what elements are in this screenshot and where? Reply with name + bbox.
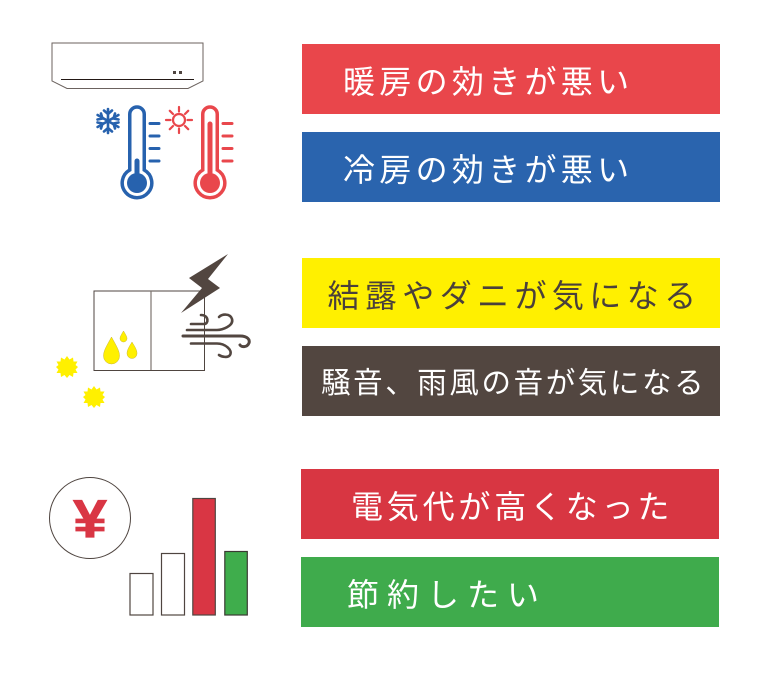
icon: window — [94, 291, 204, 370]
icon: yen coin: ¥ — [73, 489, 107, 549]
banner: poor heating: 暖房の効きが悪い — [343, 64, 633, 100]
icon: air conditioner — [52, 43, 203, 88]
icon: condensation drops — [104, 331, 137, 364]
icon: mite bottom — [83, 386, 105, 408]
icon: blue thermometer — [122, 107, 159, 198]
banner: noise — [302, 346, 720, 416]
banner: want to save — [301, 557, 719, 627]
banner: poor cooling — [302, 132, 720, 202]
banner: poor cooling: 冷房の効きが悪い — [343, 152, 633, 188]
icon: wind — [183, 315, 249, 357]
icon: lightning bolt — [181, 254, 228, 313]
banner: condensation and mites: 結露やダニが気になる — [328, 278, 702, 314]
banner: noise: 騒音、雨風の音が気になる — [321, 366, 706, 400]
banner: want to save: 節約したい — [347, 576, 547, 612]
icon: yen coin — [50, 478, 130, 558]
banner: poor heating — [302, 44, 720, 114]
banner: electricity cost: 電気代が高くなった — [351, 488, 673, 524]
banner: condensation and mites — [302, 258, 720, 328]
icon: snowflake — [98, 109, 118, 133]
banner: electricity cost — [301, 469, 719, 539]
bar chart — [130, 498, 247, 615]
icon: sun — [166, 107, 192, 133]
icon: red thermometer — [195, 107, 232, 198]
icon: mite top — [56, 356, 78, 378]
